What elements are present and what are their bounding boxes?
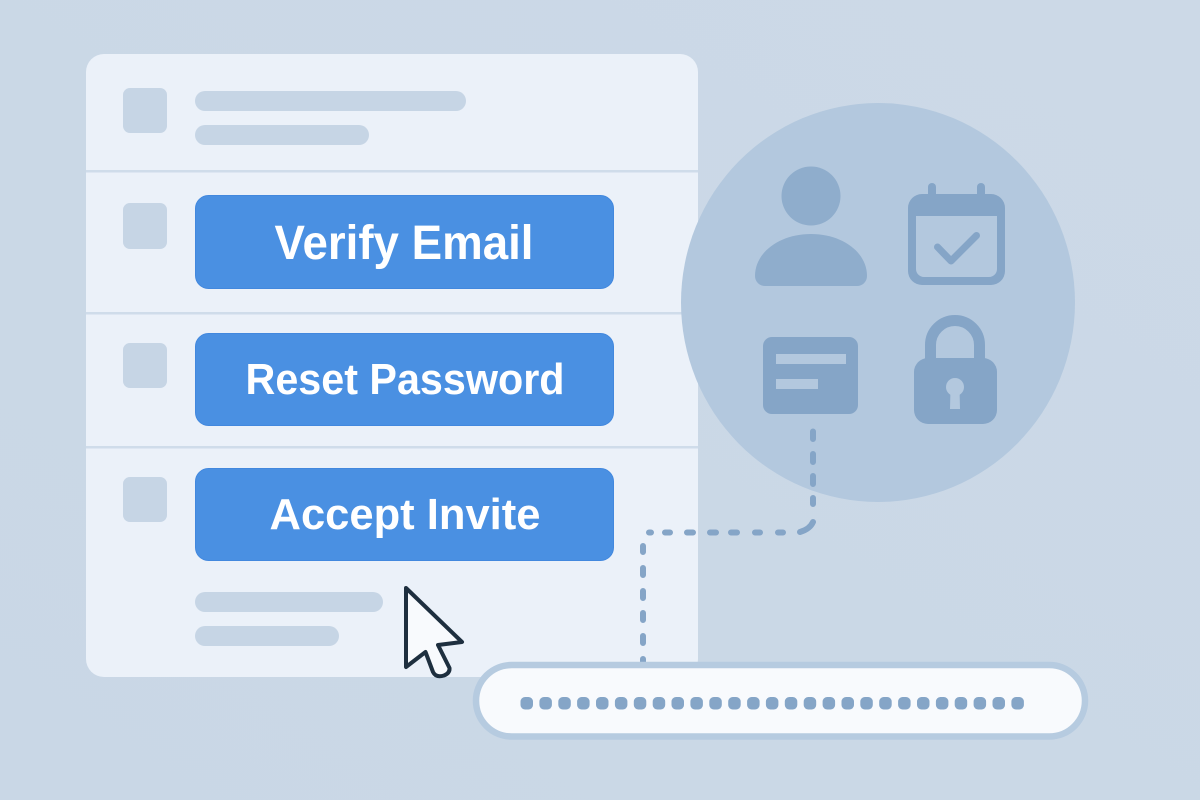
placeholder text: row 1 line 1 <box>195 91 466 111</box>
input field with masked value <box>476 665 1085 736</box>
button: Accept Invite: Accept Invite <box>270 490 540 539</box>
placeholder text: footer line 1 <box>195 592 383 612</box>
panel: email list <box>86 54 698 677</box>
circle: account icons <box>681 103 1075 502</box>
icon: person <box>755 166 867 286</box>
masked password dots <box>520 697 1024 710</box>
button: Reset Password <box>196 334 614 426</box>
checkbox: row 1 <box>123 88 167 133</box>
icon: id card <box>763 337 858 414</box>
button: Reset Password: Reset Password <box>246 355 564 404</box>
checkbox: row 4 <box>123 477 167 522</box>
button: Verify Email: Verify Email <box>274 217 534 270</box>
button: Verify Email <box>196 196 614 288</box>
checkbox: row 3 <box>123 343 167 388</box>
placeholder text: row 1 line 2 <box>195 125 369 145</box>
placeholder text: footer line 2 <box>195 626 339 646</box>
icon: calendar with check <box>908 183 1005 285</box>
checkbox: row 2 <box>123 203 167 249</box>
icon: padlock <box>914 320 997 424</box>
cursor arrow <box>406 588 462 676</box>
button: Accept Invite <box>196 468 614 560</box>
connector: dashed line from card to input <box>643 432 813 666</box>
